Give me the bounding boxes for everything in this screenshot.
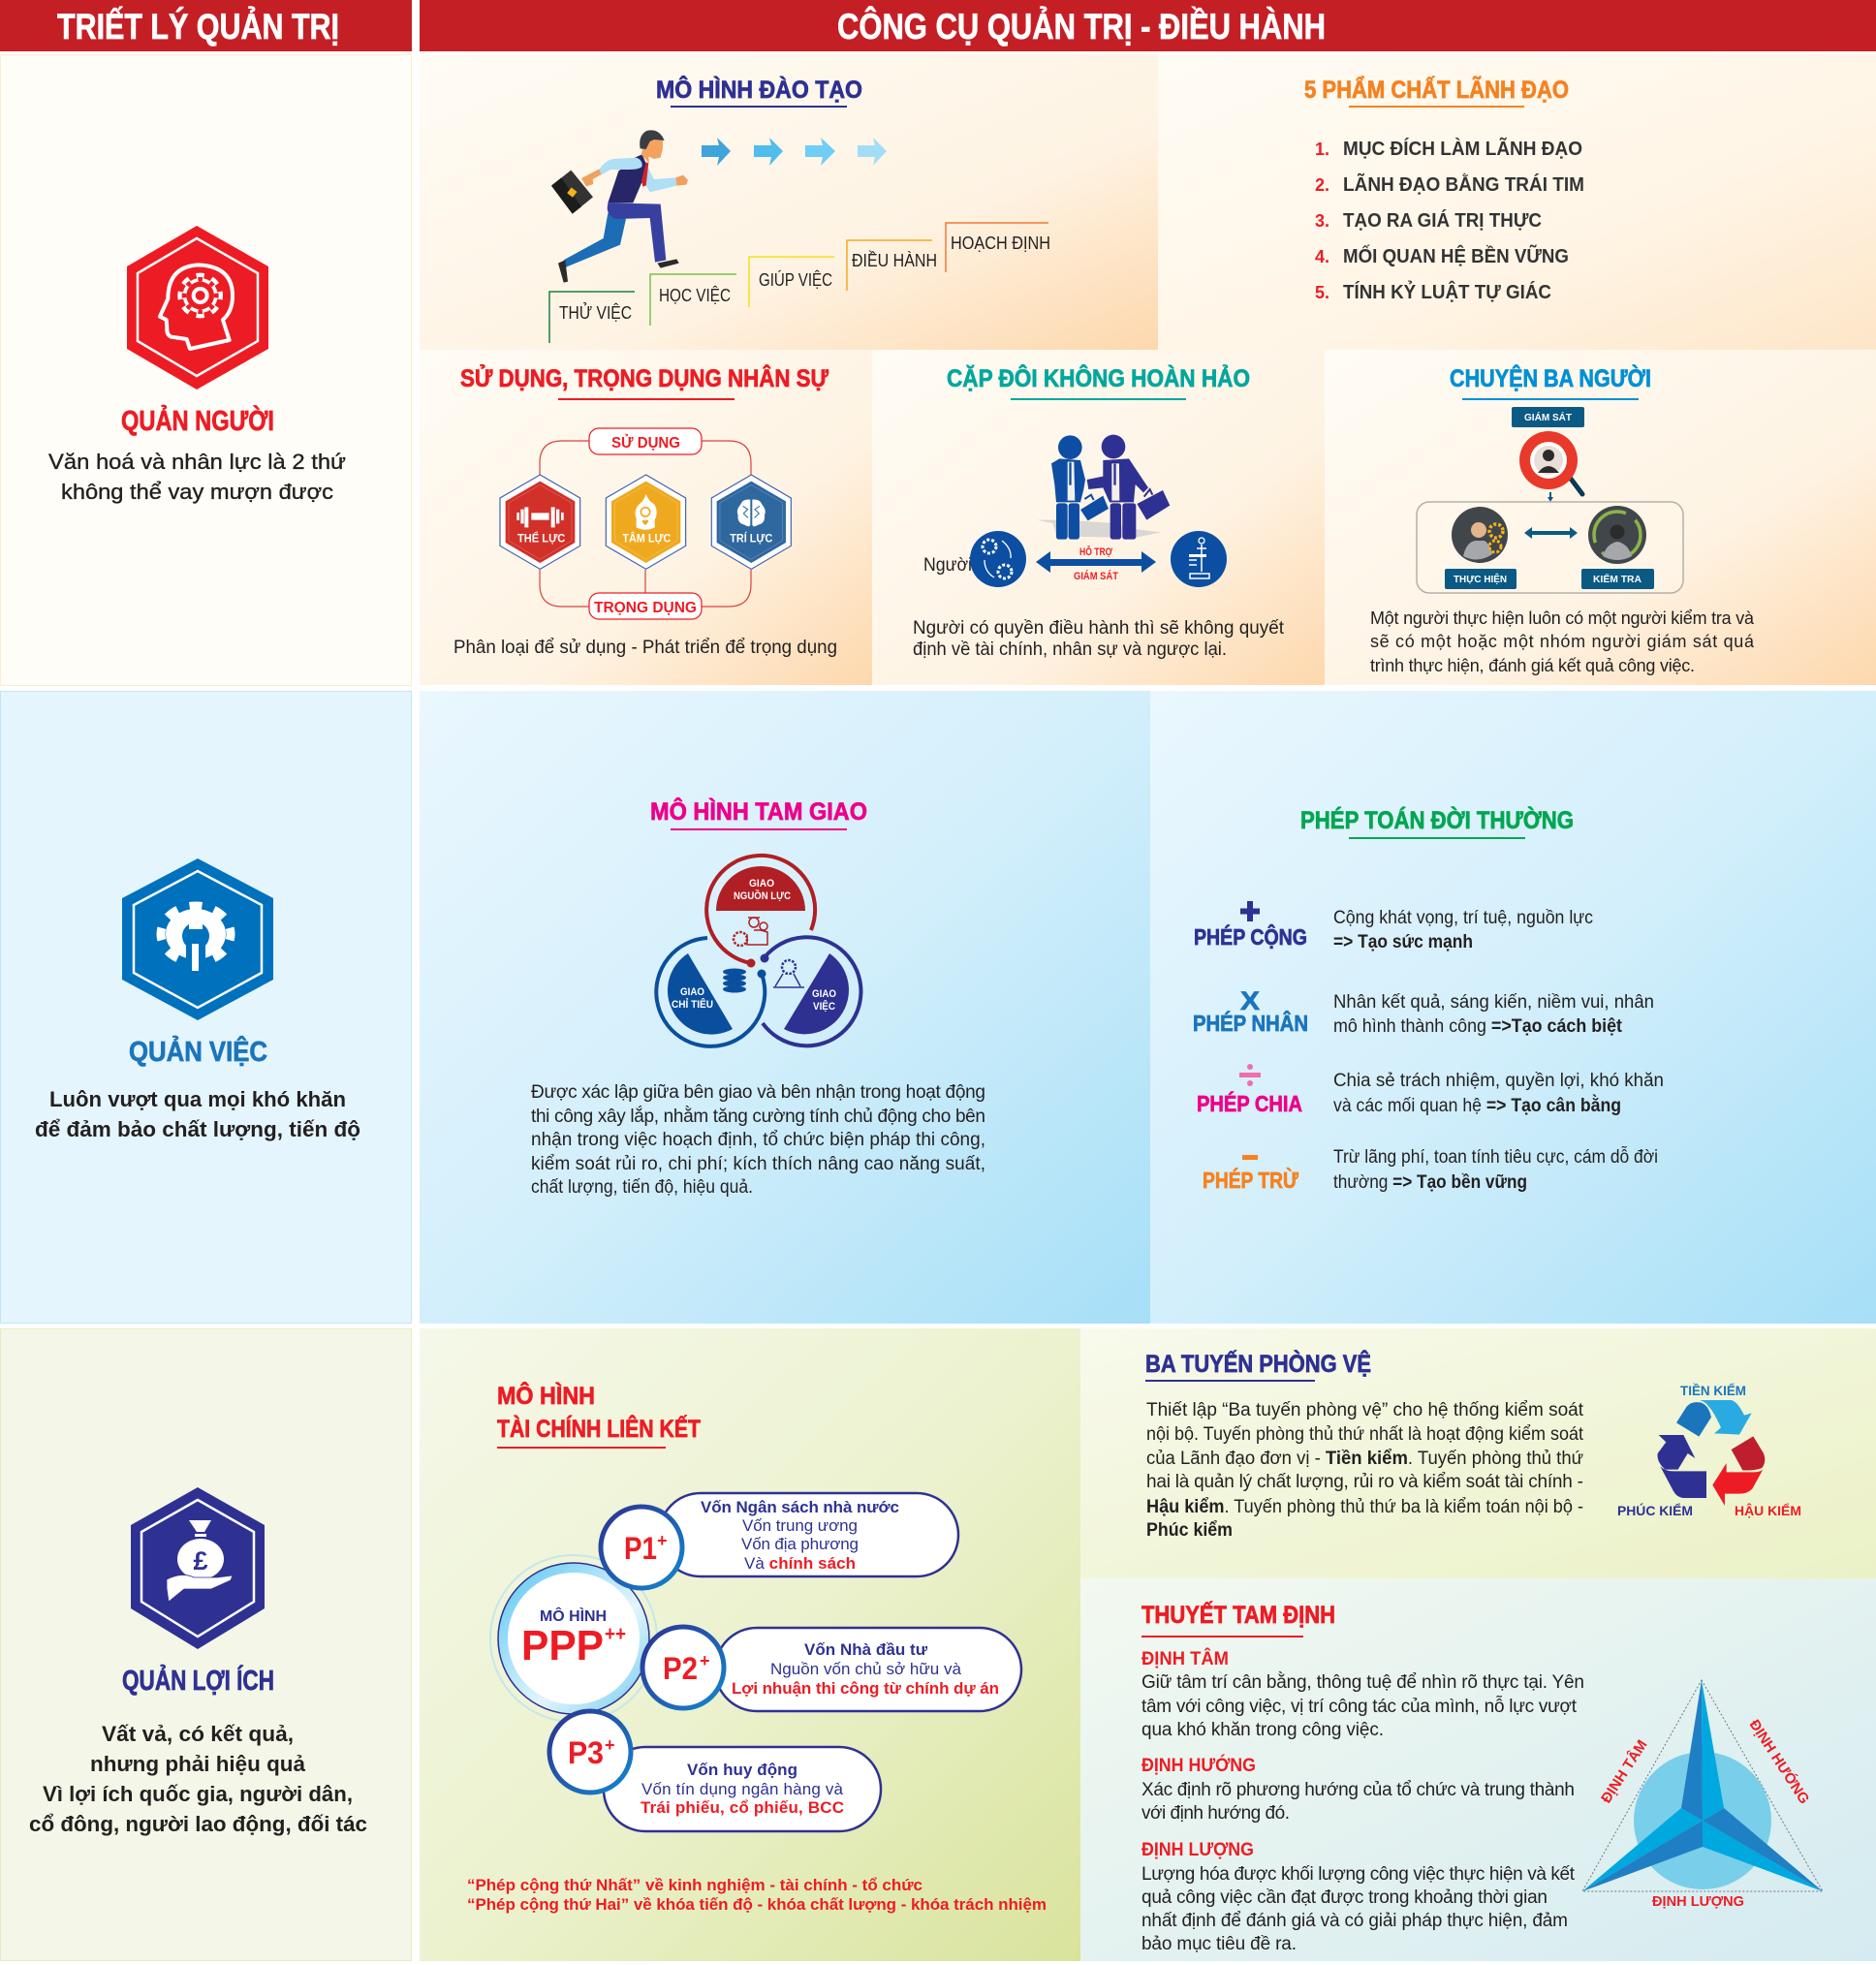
circle: p2: + (700, 1651, 710, 1670)
step: giúp việc: GIÚP VIỆC (759, 269, 832, 290)
label: trọng dụng (589, 593, 702, 619)
list: phẩm chất: MỤC ĐÍCH LÀM LÃNH ĐẠO (1343, 138, 1582, 160)
text: quản người (48, 450, 346, 504)
text: ba tuyến: hai là quản lý chất lượng, rủi ro và kiểm soát tài chính - (1146, 1472, 1583, 1492)
label: giám sát (1512, 407, 1584, 427)
pill: vốn ngân sách: Vốn trung ương (742, 1516, 858, 1535)
diagram: tam giao venn: GIAO (749, 878, 774, 889)
item: phép trừ (1203, 1146, 1658, 1193)
heading: tài chính liên kết: TÀI CHÍNH LIÊN KẾT (497, 1414, 701, 1443)
pill: vốn ngân sách (659, 1493, 958, 1576)
text: phép cộng footnote (467, 1876, 1047, 1914)
step: thử việc: THỬ VIỆC (559, 302, 632, 323)
text: ba tuyến: nội bộ. Tuyến phòng thủ thứ nhất là hoạt động kiểm soát (1146, 1424, 1584, 1445)
label: thực hiện: THỰC HIỆN (1454, 573, 1507, 585)
arrow: supervise down (1548, 492, 1553, 502)
text: người: Người (923, 555, 972, 576)
text: chuyện ba người (1370, 608, 1755, 675)
text: định lượng: ĐỊNH LƯỢNG (1141, 1840, 1254, 1860)
pill: vốn nhà đầu tư (715, 1628, 1021, 1711)
label: kiểm tra (1581, 569, 1654, 589)
heading: chuyện ba người: CHUYỆN BA NGƯỜI (1450, 363, 1651, 392)
chart: tam định star (1582, 1680, 1823, 1910)
heading: quản lợi ích: QUẢN LỢI ÍCH (122, 1664, 274, 1697)
text: quản lợi ích (29, 1722, 367, 1836)
heading: sử dụng trọng dụng: SỬ DỤNG, TRỌNG DỤNG NHÂN SỰ (460, 363, 829, 392)
pill: vốn huy động: Trái phiếu, cổ phiếu, BCC (641, 1798, 844, 1817)
panel: thuyết tam định (1080, 1578, 1876, 1961)
text: chuyện ba người: sẽ có một hoặc một nhóm người giám sát quá (1370, 632, 1755, 651)
diagram: connector lines (540, 441, 751, 607)
icon: recycle cycle: HẬU KIỂM (1735, 1502, 1801, 1518)
circle: p1 (601, 1507, 682, 1588)
text: cặp đôi: Người có quyền điều hành thì sẽ không quyết (913, 618, 1285, 639)
circle: p3 (549, 1711, 631, 1793)
box: execution and inspection (1417, 502, 1683, 593)
step: điều hành: ĐIỀU HÀNH (852, 250, 937, 270)
text: định lượng: nhất định để đánh giá và có giải pháp thực hiện, đảm (1141, 1911, 1568, 1931)
arrow: support and supervise: HỖ TRỢ (1079, 546, 1112, 558)
item: phép cộng: PHÉP CỘNG (1194, 923, 1307, 950)
panel: mô hình đào tạo (420, 54, 1158, 350)
text: định lượng: bảo mục tiêu đề ra. (1141, 1934, 1297, 1954)
icon: two businessmen (1037, 435, 1170, 540)
item: phép chia: PHÉP CHIA (1197, 1090, 1302, 1116)
text: định tâm: Giữ tâm trí cân bằng, thông tuệ để nhìn rõ thực tại. Yên (1141, 1671, 1584, 1693)
circle: mô hình ppp: MÔ HÌNH (540, 1606, 607, 1625)
header: triết lý quản trị (0, 0, 412, 51)
text: quản việc: để đảm bảo chất lượng, tiến độ (35, 1117, 360, 1141)
panel: ba tuyến phòng vệ (1080, 1328, 1876, 1578)
item: phép chia: và các mối quan hệ => Tạo cân bằng (1333, 1095, 1621, 1116)
circle: p3: + (605, 1735, 615, 1755)
circle: p1: P1 (624, 1531, 657, 1566)
diagram: tam giao venn: VIỆC (813, 1000, 835, 1013)
list: phẩm chất: 5. (1315, 283, 1329, 302)
text: định tâm: qua khó khăn trong công việc. (1141, 1720, 1384, 1740)
icon: money bag and hand (131, 1487, 265, 1649)
text: phân loại: Phân loại để sử dụng - Phát triển để trọng dụng (453, 638, 837, 658)
step: hoạch định (946, 223, 1050, 272)
header: triết lý quản trị: TRIẾT LÝ QUẢN TRỊ (57, 7, 339, 47)
icon: magnifier (1519, 431, 1582, 494)
text: quản người: không thể vay mượn được (61, 480, 333, 504)
panel: cặp đôi không hoàn hảo (872, 350, 1325, 685)
panel: phép toán đời thường (1150, 691, 1876, 1324)
text: quản việc (35, 1087, 360, 1141)
arrow: two-way (1524, 527, 1578, 539)
list: phẩm chất: TÍNH KỶ LUẬT TỰ GIÁC (1343, 280, 1551, 303)
chart: tam định star: ĐỊNH HƯỚNG (1746, 1716, 1813, 1807)
list: phẩm chất: 4. (1315, 247, 1329, 266)
circle: p1: + (657, 1531, 668, 1550)
panel: quản người (0, 54, 411, 686)
label: thực hiện (1445, 569, 1516, 589)
label: trọng dụng: TRỌNG DỤNG (594, 600, 697, 616)
list: phẩm chất: 1. (1315, 140, 1329, 159)
text: ba tuyến (1146, 1400, 1584, 1541)
list: phẩm chất: 2. (1315, 175, 1329, 195)
hexagon: thể lực (500, 475, 580, 569)
list: phẩm chất: LÃNH ĐẠO BẰNG TRÁI TIM (1343, 172, 1584, 196)
text: tam giao: kiểm soát rủi ro, chi phí; kích thích nâng cao năng suất, (531, 1154, 985, 1174)
icon: gears circle (970, 531, 1026, 587)
item: phép trừ: Trừ lãng phí, toan tính tiêu cực, cám dỗ đời (1333, 1146, 1658, 1168)
panel: quản việc (0, 692, 411, 1324)
text: tam giao: chất lượng, tiến độ, hiệu quả. (531, 1177, 753, 1198)
diagram: tam giao venn: GIAO (812, 988, 836, 1000)
text: ba tuyến: Thiết lập “Ba tuyến phòng vệ” cho hệ thống kiểm soát (1146, 1400, 1584, 1420)
icon: recycle cycle: TIỀN KIỂM (1680, 1382, 1746, 1398)
header: công cụ quản trị điều hành: CÔNG CỤ QUẢN TRỊ - ĐIỀU HÀNH (837, 6, 1326, 47)
pill: vốn nhà đầu tư: Vốn Nhà đầu tư (804, 1640, 928, 1659)
text: định hướng: với định hướng đó. (1141, 1803, 1290, 1824)
item: phép trừ: PHÉP TRỪ (1203, 1167, 1299, 1193)
panel: mô hình tam giao (420, 691, 1150, 1324)
text: quản lợi ích: cổ đông, người lao động, đối tác (29, 1812, 367, 1836)
hexagon: tâm lực: TÂM LỰC (622, 531, 672, 546)
text: quản việc: Luôn vượt qua mọi khó khăn (49, 1087, 346, 1111)
label: sử dụng (589, 428, 702, 454)
step: hoạch định: HOẠCH ĐỊNH (951, 234, 1050, 253)
heading: tam giao: MÔ HÌNH TAM GIAO (650, 796, 867, 826)
heading: ba tuyến: BA TUYẾN PHÒNG VỆ (1145, 1349, 1371, 1378)
panel: sử dụng trọng dụng nhân sự (420, 350, 872, 685)
circle: p3: P3 (568, 1735, 604, 1770)
item: phép trừ: thường => Tạo bền vững (1333, 1172, 1527, 1193)
circle: mô hình ppp: PPP (521, 1622, 604, 1669)
pill: vốn ngân sách: Vốn Ngân sách nhà nước (701, 1498, 899, 1516)
text: tam giao: thi công xây lắp, nhằm tăng cường tính chủ động cho bên (531, 1106, 985, 1127)
hexagon: trí lực (711, 475, 791, 569)
text: quản lợi ích: Vất vả, có kết quả, (102, 1722, 294, 1746)
item: phép cộng (1194, 901, 1593, 952)
item: phép cộng: => Tạo sức mạnh (1333, 932, 1473, 952)
text: định lượng (1141, 1840, 1576, 1954)
diagram: tam giao venn: CHỈ TIÊU (672, 998, 713, 1011)
circle: mô hình ppp (490, 1555, 657, 1722)
icon: money bag and hand: £ (193, 1546, 208, 1575)
text: ba tuyến: Phúc kiểm (1146, 1520, 1233, 1541)
text: tam giao: Được xác lập giữa bên giao và bên nhận trong hoạt động (531, 1082, 985, 1103)
text: định tâm (1141, 1648, 1584, 1740)
icon: gear wrench (122, 858, 273, 1020)
pill: vốn huy động: Vốn tín dụng ngân hàng và (641, 1780, 844, 1798)
label: kiểm tra: KIỂM TRA (1593, 573, 1642, 585)
heading: phép toán: PHÉP TOÁN ĐỜI THƯỜNG (1300, 805, 1574, 834)
chart: tam định star: ĐỊNH LƯỢNG (1652, 1893, 1744, 1910)
item: phép nhân: PHÉP NHÂN (1193, 1010, 1308, 1036)
hexagon: trí lực: TRÍ LỰC (730, 531, 773, 546)
list: phẩm chất (1315, 138, 1584, 303)
text: định hướng (1141, 1755, 1575, 1824)
icon: recycle cycle (1617, 1382, 1801, 1518)
icon: thực hiện (1452, 507, 1508, 563)
diagram: tam giao venn: GIAO (680, 986, 704, 998)
text: định hướng: ĐỊNH HƯỚNG (1141, 1755, 1256, 1776)
heading: quản người: QUẢN NGƯỜI (121, 404, 274, 437)
text: quản lợi ích: Vì lợi ích quốc gia, người dân, (43, 1782, 353, 1806)
circle: p2 (642, 1627, 724, 1708)
icon: monitoring circle (1171, 531, 1227, 587)
step: thử việc (549, 292, 635, 343)
text: định tâm: tâm với công việc, vị trí công tác của mình, nỗ lực vượt (1141, 1696, 1578, 1717)
list: phẩm chất: 3. (1315, 211, 1329, 231)
list: phẩm chất: TẠO RA GIÁ TRỊ THỰC (1343, 209, 1542, 232)
text: cặp đôi (913, 618, 1285, 660)
header: công cụ quản trị điều hành (420, 0, 1876, 51)
text: định tâm: ĐỊNH TÂM (1141, 1648, 1229, 1669)
arrows: progress (702, 138, 887, 166)
heading: cặp đôi: CẶP ĐÔI KHÔNG HOÀN HẢO (947, 363, 1250, 392)
arrow: support and supervise (1036, 546, 1156, 582)
icon: recycle cycle: PHÚC KIỂM (1617, 1502, 1693, 1518)
text: quản người: Văn hoá và nhân lực là 2 thứ (48, 450, 346, 474)
item: phép chia (1197, 1064, 1664, 1116)
text: ba tuyến: Hậu kiểm. Tuyến phòng thủ thứ ba là kiểm toán nội bộ - (1146, 1497, 1583, 1517)
text: chuyện ba người: Một người thực hiện luôn có một người kiểm tra và (1370, 608, 1755, 628)
label: giám sát: GIÁM SÁT (1524, 411, 1573, 423)
text: tam giao (531, 1082, 985, 1198)
list: phẩm chất: MỐI QUAN HỆ BỀN VỮNG (1343, 244, 1569, 267)
heading: mô hình đào tạo: MÔ HÌNH ĐÀO TẠO (656, 75, 862, 104)
icon: kiểm tra (1588, 506, 1646, 564)
step: điều hành (847, 240, 937, 291)
icon: head with gear (127, 226, 268, 390)
heading: quản việc: QUẢN VIỆC (129, 1035, 267, 1068)
text: quản lợi ích: nhưng phải hiệu quả (90, 1752, 306, 1776)
hexagon: tâm lực (606, 475, 686, 569)
pill: vốn nhà đầu tư: Lợi nhuận thi công từ chính dự án (732, 1679, 999, 1698)
text: chuyện ba người: trình thực hiện, đánh giá kết quả công việc. (1370, 656, 1695, 675)
item: phép chia: Chia sẻ trách nhiệm, quyền lợi, khó khăn (1333, 1071, 1664, 1091)
item: phép nhân: X (1240, 986, 1260, 1015)
text: định hướng: Xác định rõ phương hướng của tổ chức và trung thành (1141, 1780, 1575, 1800)
pill: vốn ngân sách: Và chính sách (744, 1554, 856, 1573)
item: phép nhân (1193, 986, 1654, 1037)
item: phép nhân: mô hình thành công =>Tạo cách biệt (1333, 1016, 1623, 1037)
icon: running businessman (551, 130, 688, 283)
text: định lượng: Lượng hóa được khối lượng công việc thực hiện và kết (1141, 1864, 1576, 1885)
pill: vốn nhà đầu tư: Nguồn vốn chủ sở hữu và (770, 1660, 962, 1678)
panel: 5 phẩm chất lãnh đạo (1158, 54, 1876, 350)
pill: vốn huy động: Vốn huy động (687, 1761, 797, 1779)
item: phép cộng: Cộng khát vọng, trí tuệ, nguồn lực (1333, 908, 1593, 928)
hexagon: thể lực: THỂ LỰC (517, 531, 566, 546)
step: học việc (650, 274, 736, 326)
arrow: support and supervise: GIÁM SÁT (1074, 570, 1118, 582)
heading: 5 phẩm chất: 5 PHẨM CHẤT LÃNH ĐẠO (1304, 75, 1569, 104)
circle: p2: P2 (663, 1651, 698, 1686)
diagram: tam giao venn (656, 856, 860, 1046)
step: giúp việc (749, 257, 834, 307)
heading: tài chính liên kết: MÔ HÌNH (497, 1381, 595, 1410)
chart: tam định star: ĐỊNH TÂM (1597, 1736, 1651, 1806)
heading: thuyết tam định: THUYẾT TAM ĐỊNH (1141, 1601, 1335, 1629)
text: tam giao: nhận trong việc hoạch định, tổ chức biện pháp thi công, (531, 1130, 985, 1150)
panel: chuyện ba người (1325, 350, 1876, 685)
circle: mô hình ppp: ++ (605, 1623, 626, 1645)
step: học việc: HỌC VIỆC (659, 286, 731, 305)
text: phép cộng footnote: “Phép cộng thứ Hai” về khóa tiến độ - khóa chất lượng - khóa trách nhiệm (467, 1895, 1047, 1914)
panel: quản lợi ích (0, 1329, 411, 1961)
panel: mô hình tài chính liên kết (420, 1328, 1080, 1961)
label: sử dụng: SỬ DỤNG (611, 433, 680, 452)
text: cặp đôi: định về tài chính, nhân sự và ngược lại. (913, 639, 1227, 660)
diagram: tam giao venn: NGUỒN LỰC (734, 889, 791, 902)
pill: vốn ngân sách: Vốn địa phương (741, 1535, 859, 1553)
item: phép nhân: Nhân kết quả, sáng kiến, niềm vui, nhân (1333, 992, 1654, 1013)
text: định lượng: quả công việc cần đạt được trong khoảng thời gian (1141, 1887, 1548, 1908)
heading: tài chính liên kết (497, 1381, 701, 1449)
text: ba tuyến: của Lãnh đạo đơn vị - Tiền kiểm. Tuyến phòng thủ thứ (1146, 1449, 1583, 1469)
pill: vốn huy động (604, 1747, 881, 1831)
text: phép cộng footnote: “Phép cộng thứ Nhất” về kinh nghiệm - tài chính - tổ chức (467, 1876, 922, 1894)
